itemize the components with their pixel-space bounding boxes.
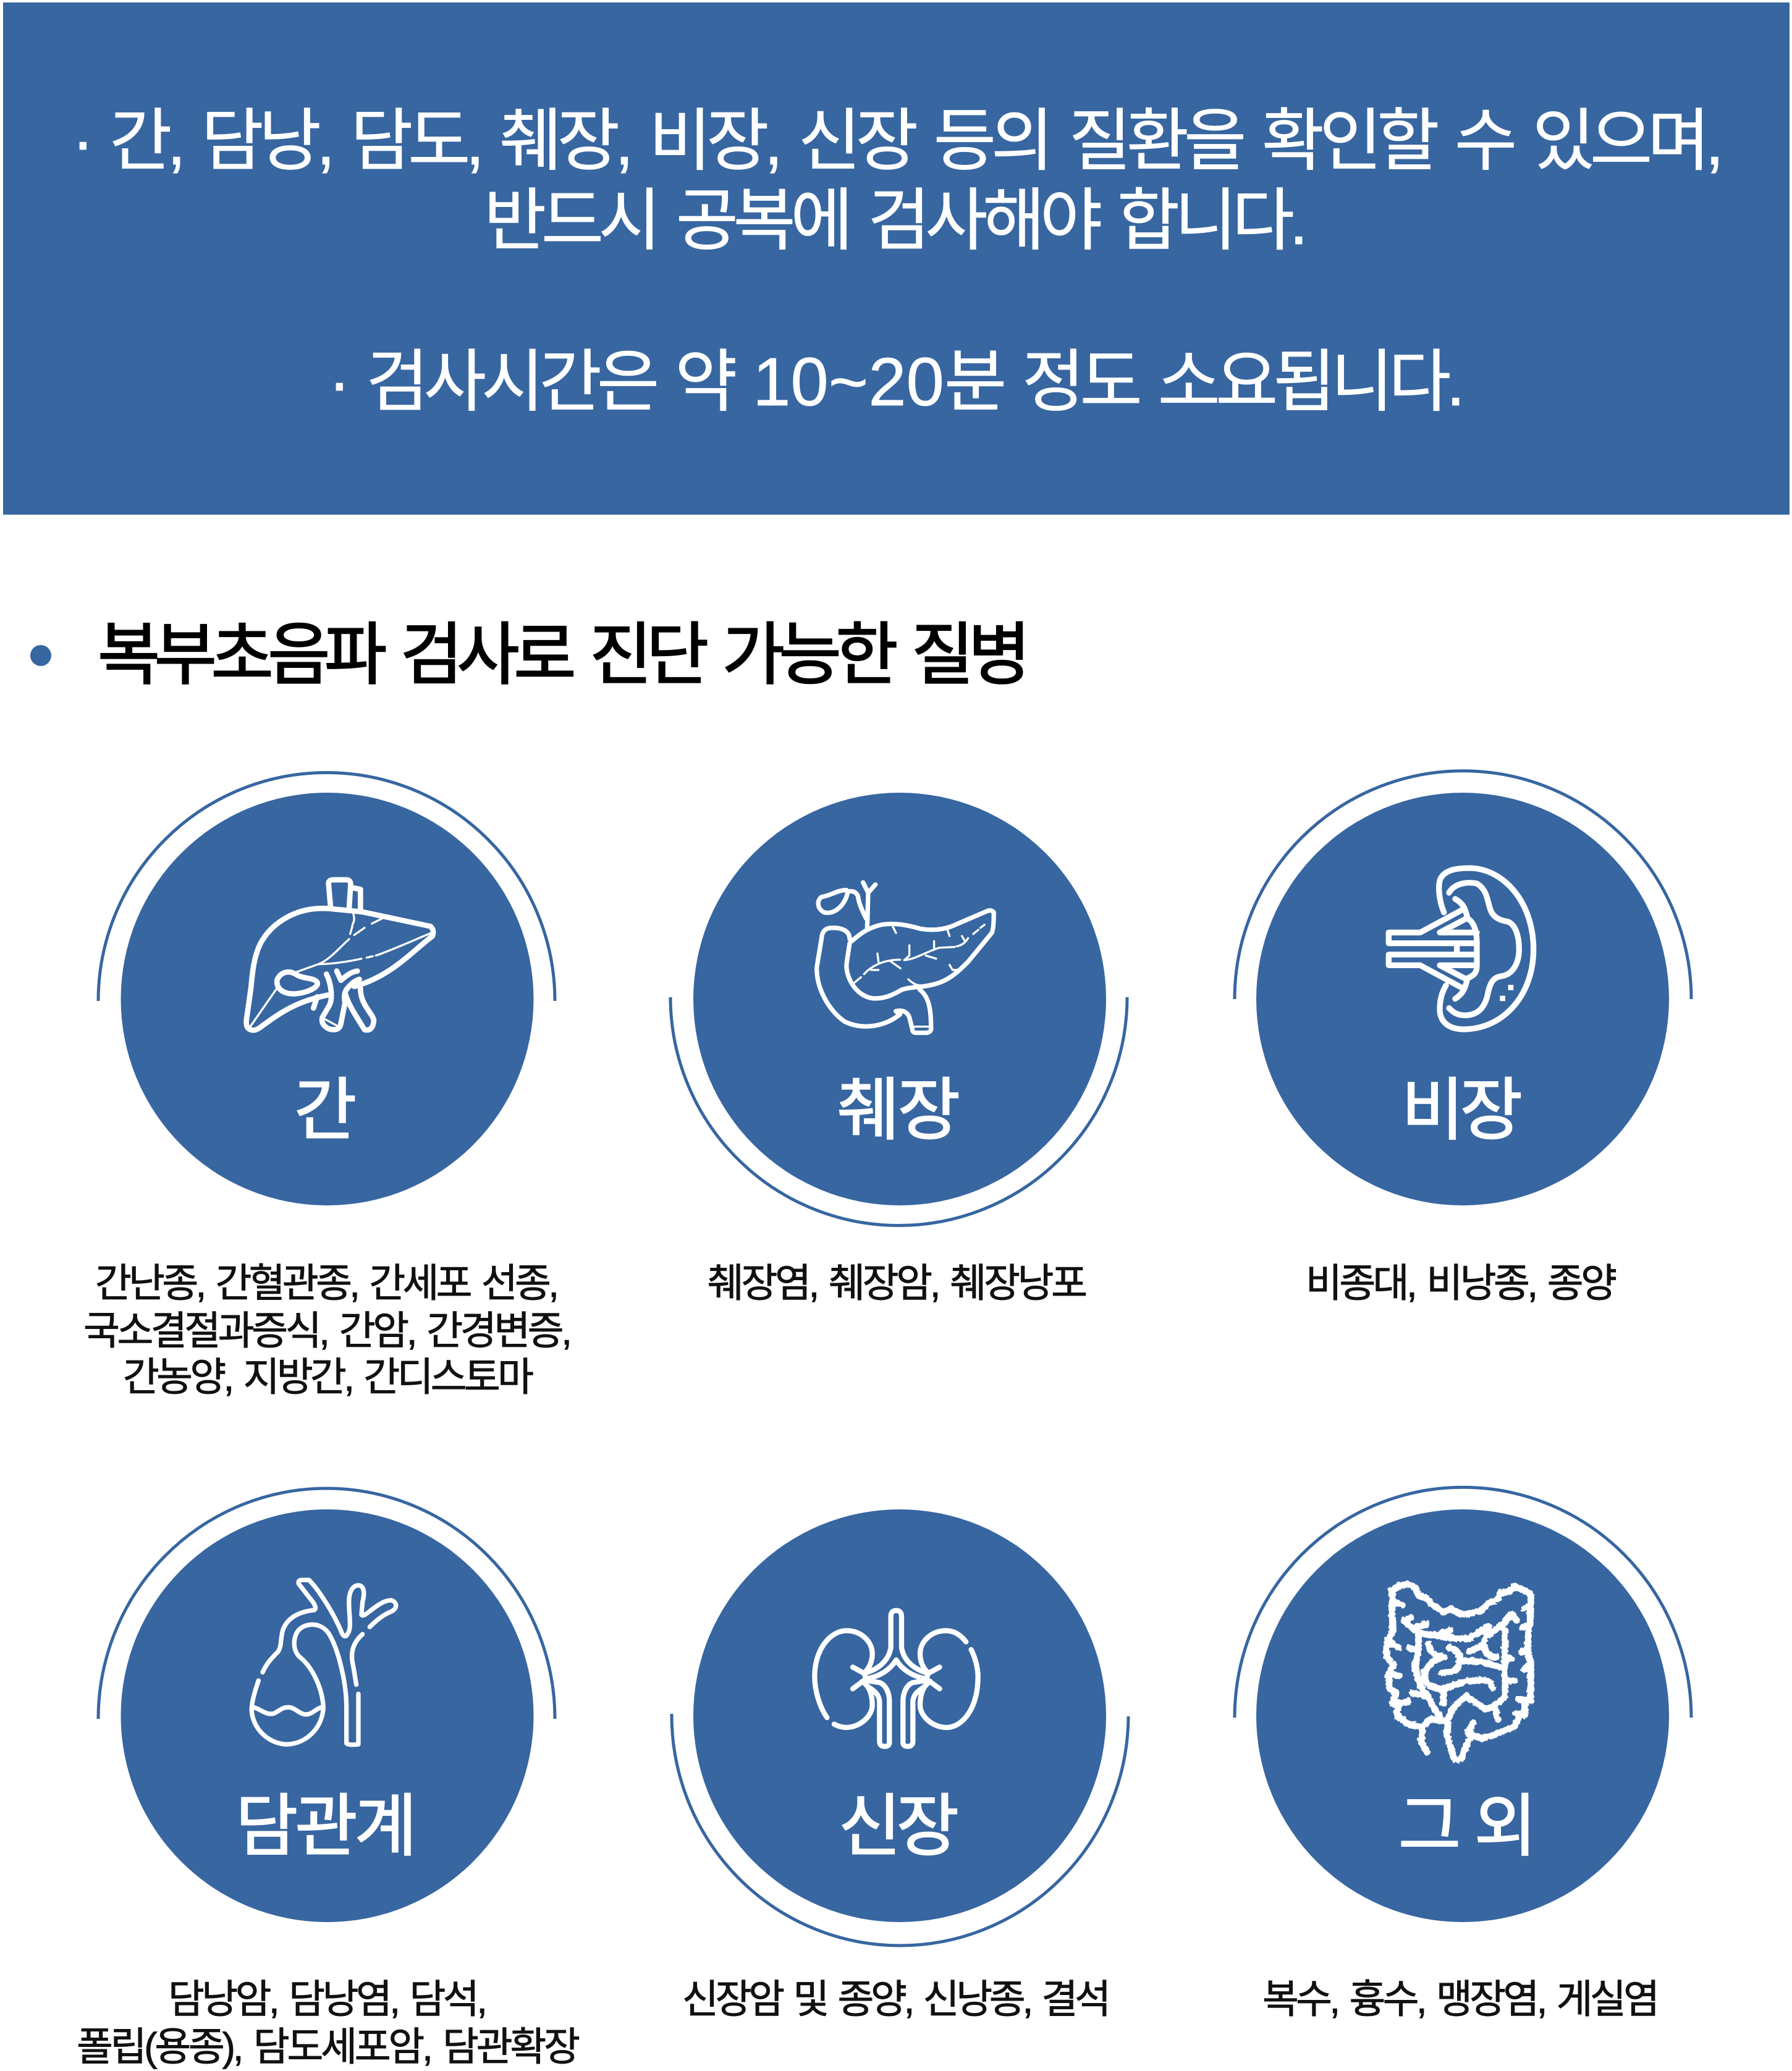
biliary diseases line 2: 폴립(용종), 담도세포암, 담관확장: [77, 2025, 579, 2069]
liver diseases line 2: 국소결절과증식, 간암, 간경변증,: [83, 1309, 570, 1353]
panel: pancreas: [670, 793, 1127, 1305]
others label: 그 외: [1398, 1789, 1537, 1865]
banner panel: [3, 2, 1790, 515]
liver circle: [121, 793, 534, 1205]
icon: spleen: [1388, 868, 1534, 1029]
biliary diseases line 1: 담낭암, 담낭염, 담석,: [168, 1977, 485, 2022]
biliary arc: [98, 1488, 555, 1719]
panel: spleen: [1235, 771, 1691, 1305]
others arc: [1235, 1487, 1691, 1718]
heading bullet: [30, 645, 51, 666]
icon: intestines: [1385, 1583, 1529, 1759]
panel: liver: [83, 772, 570, 1399]
liver label: 간: [294, 1073, 357, 1149]
kidney circle: [693, 1509, 1106, 1922]
icon: kidneys: [814, 1611, 978, 1747]
kidney label: 신장: [839, 1789, 959, 1865]
banner text: line 2: 반드시 공복에 검사해야 합니다.: [484, 183, 1303, 259]
kidney arc: [672, 1714, 1128, 1946]
kidney diseases: 신장암 및 종양, 신낭종, 결석: [682, 1977, 1109, 2022]
heading: 복부초음파 검사로 진단 가능한 질병: [98, 617, 1026, 693]
banner text: line 3: · 검사시간은 약 10~20분 정도 소요됩니다.: [328, 344, 1460, 420]
icon: pancreas: [817, 882, 994, 1033]
others circle: [1256, 1509, 1669, 1922]
liver arc: [98, 772, 555, 1001]
banner text: line 1: · 간, 담낭, 담도, 췌장, 비장, 신장 등의 질환을 확인할 수 있으며,: [72, 103, 1719, 179]
panel: others: [1235, 1487, 1691, 2022]
liver diseases: [83, 1261, 570, 1399]
others diseases: 복수, 흉수, 맹장염, 게실염: [1262, 1977, 1657, 2022]
icon: gallbladder: [251, 1580, 396, 1745]
spleen arc: [1235, 771, 1691, 999]
spleen circle: [1256, 793, 1669, 1205]
spleen diseases: 비종대, 비낭종, 종양: [1306, 1261, 1616, 1305]
biliary label: 담관계: [235, 1789, 417, 1865]
pancreas circle: [693, 793, 1106, 1205]
liver diseases line 1: 간난종, 간혈관종, 간세포 선종,: [95, 1261, 557, 1305]
liver diseases line 3: 간농양, 지방간, 간디스토마: [123, 1355, 533, 1399]
pancreas label: 췌장: [837, 1073, 960, 1149]
spleen label: 비장: [1401, 1073, 1523, 1149]
biliary circle: [121, 1509, 534, 1922]
pancreas arc: [670, 997, 1127, 1226]
icon: liver: [247, 880, 433, 1030]
pancreas diseases: 췌장염, 췌장암, 췌장낭포: [708, 1261, 1086, 1305]
panel: kidney: [672, 1509, 1128, 2022]
biliary diseases: [77, 1977, 579, 2069]
panel: biliary system: [77, 1488, 579, 2069]
